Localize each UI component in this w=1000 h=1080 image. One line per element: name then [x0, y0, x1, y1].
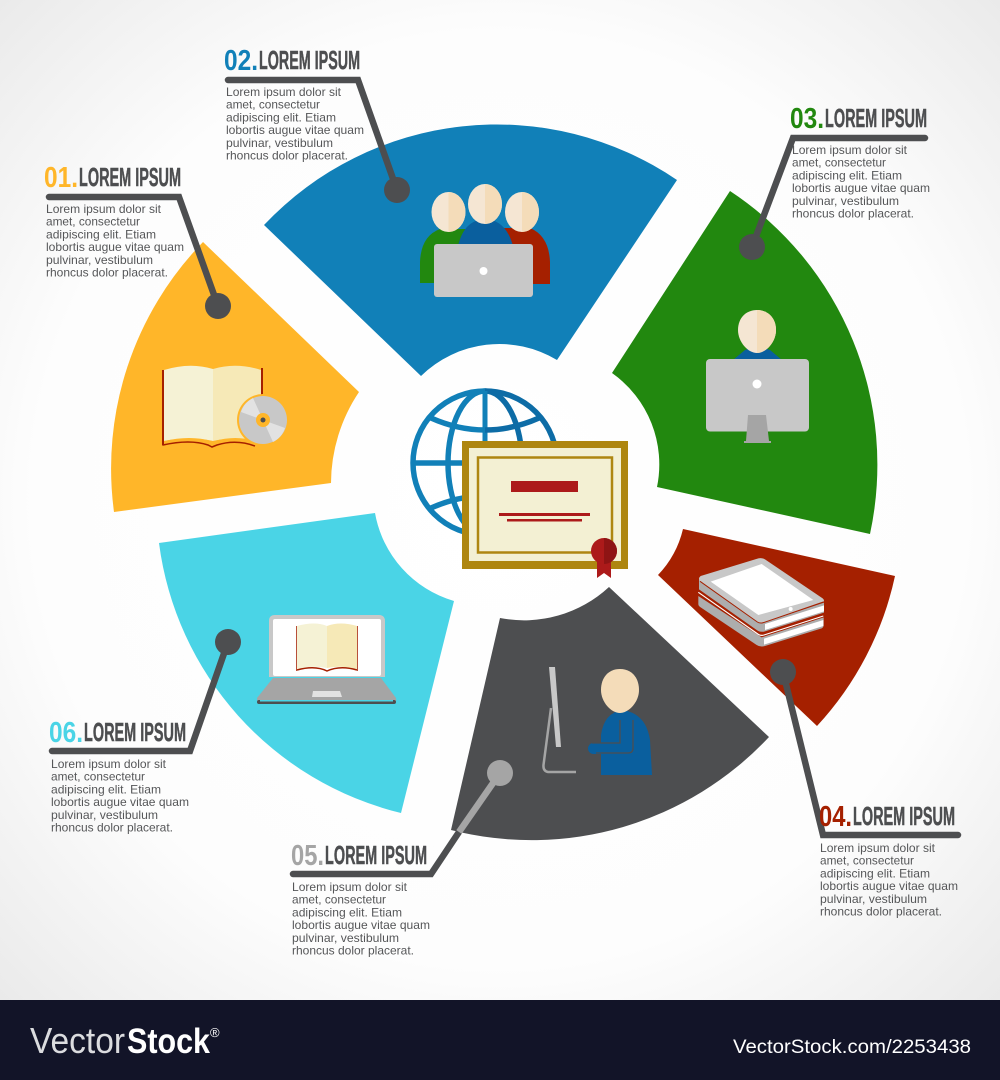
icon: stacked tablets [698, 558, 824, 646]
footer id: VectorStock.com/2253438 [733, 1037, 971, 1058]
leader 05 [293, 760, 513, 874]
text block 01: Lorem ipsum dolor sit [46, 202, 162, 216]
heading 01: 01. [44, 162, 78, 194]
heading 02 [224, 45, 360, 77]
footer logo: Stock [127, 1022, 210, 1061]
footer bar [0, 1000, 1000, 1080]
segment 06: cyan [159, 513, 454, 813]
text block 05: rhoncus dolor placerat. [292, 944, 414, 958]
text block 05: amet, consectetur [292, 893, 386, 907]
footer logo [30, 1020, 210, 1061]
text block 02: rhoncus dolor placerat. [226, 148, 348, 162]
icon: laptop with book [257, 615, 396, 704]
text block 06: pulvinar, vestibulum [51, 808, 158, 822]
text block 01: adipiscing elit. Etiam [46, 227, 156, 241]
heading 01 [44, 162, 181, 194]
text block 04: rhoncus dolor placerat. [820, 904, 942, 918]
text block 05: adipiscing elit. Etiam [292, 905, 402, 919]
heading 03 [790, 103, 927, 135]
text block 02: amet, consectetur [226, 98, 320, 112]
leader 04 [770, 659, 958, 835]
heading 05: 05. [291, 840, 324, 872]
icon: group of people with laptop [420, 184, 550, 297]
leader 06 [52, 629, 241, 751]
text block 06: lobortis augue vitae quam [51, 795, 189, 809]
leader 01 [49, 197, 231, 319]
heading 01: LOREM IPSUM [79, 162, 181, 192]
text block 06: adipiscing elit. Etiam [51, 782, 161, 796]
text block 03: Lorem ipsum dolor sit [792, 143, 908, 157]
text block 02: lobortis augue vitae quam [226, 123, 364, 137]
segment 03: green [612, 191, 877, 534]
text block 01: amet, consectetur [46, 215, 140, 229]
heading 03: 03. [790, 103, 824, 135]
leader 03 [739, 138, 925, 260]
text block 03: adipiscing elit. Etiam [792, 168, 902, 182]
text block 03: lobortis augue vitae quam [792, 181, 930, 195]
heading 06 [49, 717, 186, 749]
icon: person at side-view computer [543, 667, 652, 775]
text block 04: Lorem ipsum dolor sit [820, 841, 936, 855]
icon: certificate [462, 441, 628, 578]
registered mark: ® [210, 1025, 220, 1040]
text block 05: Lorem ipsum dolor sit [292, 880, 408, 894]
icon: globe [413, 391, 557, 535]
segment 04: red [658, 529, 895, 726]
text block 04: amet, consectetur [820, 854, 914, 868]
heading 05: LOREM IPSUM [325, 840, 427, 870]
text block 06: Lorem ipsum dolor sit [51, 757, 167, 771]
text block 04: pulvinar, vestibulum [820, 892, 927, 906]
text block 02: pulvinar, vestibulum [226, 136, 333, 150]
text block 01: rhoncus dolor placerat. [46, 266, 168, 280]
heading 06: LOREM IPSUM [84, 717, 186, 747]
heading 05 [291, 840, 427, 872]
segment 02: blue [264, 124, 677, 376]
text block 06: amet, consectetur [51, 770, 145, 784]
heading 02: LOREM IPSUM [259, 45, 360, 75]
text block 03: pulvinar, vestibulum [792, 194, 899, 208]
text block 05: pulvinar, vestibulum [292, 931, 399, 945]
leader 02 [228, 80, 410, 203]
icon: book with disc [162, 366, 289, 447]
text block 06: rhoncus dolor placerat. [51, 820, 173, 834]
text block 04: lobortis augue vitae quam [820, 879, 958, 893]
segment 05: dark grey [451, 587, 769, 840]
footer logo: Vector [30, 1020, 125, 1061]
text block 02: Lorem ipsum dolor sit [226, 85, 342, 99]
text block 04: adipiscing elit. Etiam [820, 866, 930, 880]
heading 04 [819, 801, 955, 833]
heading 06: 06. [49, 717, 83, 749]
text block 03: amet, consectetur [792, 156, 886, 170]
text block 01: lobortis augue vitae quam [46, 240, 184, 254]
icon: person at desktop monitor [706, 310, 809, 443]
segment 01: yellow [111, 242, 359, 512]
text block 01: pulvinar, vestibulum [46, 253, 153, 267]
text block 02: adipiscing elit. Etiam [226, 110, 336, 124]
text block 03: rhoncus dolor placerat. [792, 206, 914, 220]
heading 02: 02. [224, 45, 258, 77]
heading 04: 04. [819, 801, 852, 833]
text block 05: lobortis augue vitae quam [292, 918, 430, 932]
